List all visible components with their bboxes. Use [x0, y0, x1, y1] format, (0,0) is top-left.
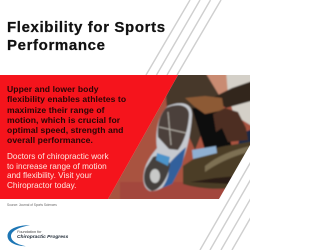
paragraph: key message	[7, 84, 126, 145]
thigh	[166, 72, 222, 150]
shoe blue trim	[162, 147, 186, 188]
logo name: Chiropractic Progress	[17, 234, 68, 240]
shoe outline	[143, 103, 192, 191]
paragraph: key message: optimal speed, strength and	[7, 125, 124, 135]
title: Flexibility for Sports	[7, 19, 166, 36]
paragraph: call to action: to increase range of motion	[7, 162, 107, 171]
sock and shoe upper	[192, 146, 217, 159]
paragraph: call to action: and flexibility. Visit your	[7, 171, 92, 180]
logo arc	[8, 225, 30, 246]
title	[7, 19, 166, 54]
sole heel	[144, 156, 170, 191]
paragraph: key message: overall performance.	[7, 135, 93, 145]
track	[108, 90, 250, 199]
paragraph: call to action	[7, 152, 109, 190]
paragraph: key message: motion, which is crucial for	[7, 115, 120, 125]
hand upper	[185, 96, 224, 114]
paragraph: key message: Upper and lower body	[7, 84, 99, 94]
shirt	[226, 75, 250, 126]
paragraph: key message: flexibility enables athletes to	[7, 94, 126, 104]
sole forefoot	[158, 105, 189, 150]
hand lower	[213, 108, 248, 142]
paragraph: call to action: Chiropractor today.	[7, 181, 76, 190]
red text panel	[0, 75, 178, 199]
background stripes and photo panel	[108, 0, 250, 250]
logo: Foundation for Chiropractic Progress	[8, 225, 68, 246]
paragraph: key message: maximize their range of	[7, 105, 105, 115]
calf	[183, 141, 255, 189]
photo: athlete stretching	[108, 75, 250, 199]
paragraph: call to action: Doctors of chiropractic work	[7, 152, 109, 161]
arm	[216, 81, 250, 109]
shorts	[192, 106, 232, 150]
title: Performance	[7, 37, 106, 54]
logo wording: Foundation for	[17, 230, 42, 234]
source note: Source: Journal of Sports Sciences	[7, 203, 57, 207]
